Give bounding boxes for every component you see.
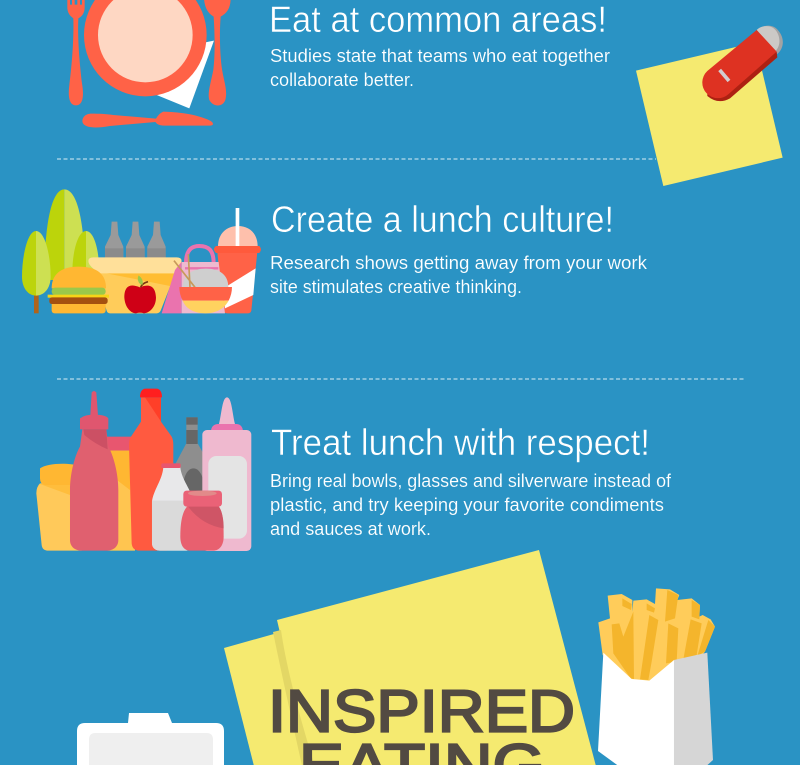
grey bottle — [176, 417, 209, 513]
knife — [82, 112, 213, 127]
title: inspired eating — [268, 678, 575, 765]
apple — [124, 275, 156, 313]
ketchup bottle — [70, 391, 118, 551]
text: create a lunch culture: Research shows getting away from your work — [270, 252, 648, 273]
mustard jar — [36, 464, 82, 551]
plate — [84, 0, 207, 96]
lunch box — [88, 257, 182, 313]
icon: lunch foods with trees, burger, lunchbox and cup — [22, 189, 261, 313]
icon: white clipboard — [77, 713, 224, 765]
title: inspired eating: INSPIRED — [268, 678, 575, 744]
icon: sticky note with red eraser clip — [636, 26, 783, 186]
trees — [22, 189, 99, 313]
icon: place setting with plate, fork, spoon and knife — [67, 0, 231, 127]
fork — [67, 0, 85, 105]
yellow notes — [224, 550, 597, 765]
text: treat lunch with respect: plastic, and try keeping your favorite condiments — [270, 494, 664, 515]
icon: condiment bottles and jars — [36, 389, 251, 551]
napkin — [157, 41, 214, 108]
burger — [48, 267, 109, 313]
text: treat lunch with respect: Bring real bowls, glasses and silverware instead of — [270, 470, 672, 491]
fries box — [598, 653, 713, 765]
sticky note — [636, 42, 783, 186]
text: create a lunch culture: site stimulates creative thinking. — [270, 276, 522, 297]
icon: french fries — [598, 588, 715, 765]
eraser — [702, 26, 783, 101]
fries — [598, 588, 715, 683]
cup with straw — [214, 208, 261, 313]
text: treat lunch with respect: and sauces at work. — [270, 518, 431, 539]
red bottle — [129, 389, 173, 551]
text: create a lunch culture — [270, 252, 648, 297]
text: eat at common areas: Studies state that teams who eat together — [270, 45, 610, 66]
bottles — [105, 222, 166, 258]
milk bottle — [152, 463, 193, 551]
heading: create a lunch culture: Create a lunch culture! — [271, 199, 614, 240]
text: eat at common areas — [270, 45, 610, 90]
small jam jar — [180, 491, 224, 551]
heading: eat at common areas: Eat at common areas! — [269, 0, 607, 40]
squeeze bottle pink — [202, 397, 251, 551]
bowl with rice and chopsticks — [174, 254, 232, 313]
spoon — [204, 0, 231, 105]
sticky notes with title — [224, 550, 597, 765]
heading: treat lunch with respect: Treat lunch with respect! — [271, 422, 650, 463]
mustard bottle — [107, 437, 135, 551]
text: treat lunch with respect — [270, 470, 672, 539]
text: eat at common areas: collaborate better. — [270, 69, 414, 90]
pink bag — [162, 246, 225, 313]
